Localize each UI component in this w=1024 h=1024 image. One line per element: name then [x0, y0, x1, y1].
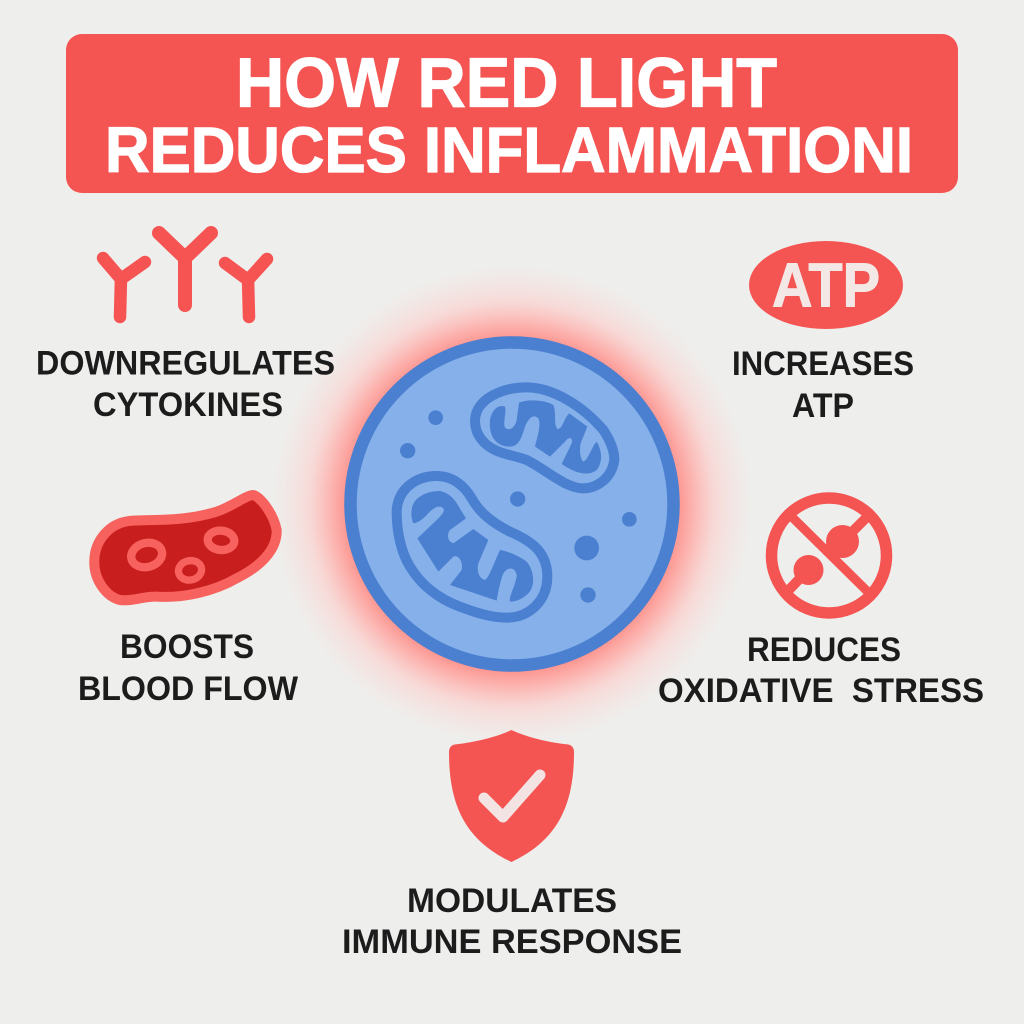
icon: no free radicals — [772, 498, 886, 613]
label: boosts blood flow: BLOOD FLOW — [78, 670, 299, 708]
icon: ATP badge — [749, 241, 903, 329]
label: modulates immune response — [342, 882, 682, 961]
label: modulates immune response: IMMUNE RESPONSE — [342, 923, 682, 961]
icon: antibodies — [103, 233, 267, 317]
label: modulates immune response: MODULATES — [407, 882, 617, 920]
label: increases ATP — [732, 345, 914, 425]
organelle dots — [400, 410, 637, 603]
mitochondrion upper — [475, 387, 614, 488]
cell with mitochondria — [350, 342, 674, 666]
label: downregulates cytokines: DOWNREGULATES — [36, 344, 335, 382]
label: boosts blood flow: BOOSTS — [120, 628, 254, 666]
icon: ATP badge: ATP — [772, 252, 880, 320]
label: downregulates cytokines — [36, 344, 335, 424]
label: reduces oxidative stress: REDUCES — [747, 631, 901, 669]
icon: shield with check — [449, 730, 574, 862]
title banner — [66, 34, 958, 193]
central glow — [272, 265, 752, 745]
title banner: HOW RED LIGHT — [236, 44, 777, 122]
label: reduces oxidative stress — [658, 631, 984, 710]
label: downregulates cytokines: CYTOKINES — [93, 386, 283, 424]
label: boosts blood flow — [78, 628, 299, 708]
icon: red blood cell — [94, 495, 277, 600]
title banner: REDUCES INFLAMMATIONI — [105, 114, 913, 186]
label: increases ATP: ATP — [792, 387, 854, 425]
mitochondrion lower — [397, 476, 547, 618]
label: increases ATP: INCREASES — [732, 345, 914, 383]
label: reduces oxidative stress: OXIDATIVE STRESS — [658, 672, 984, 710]
